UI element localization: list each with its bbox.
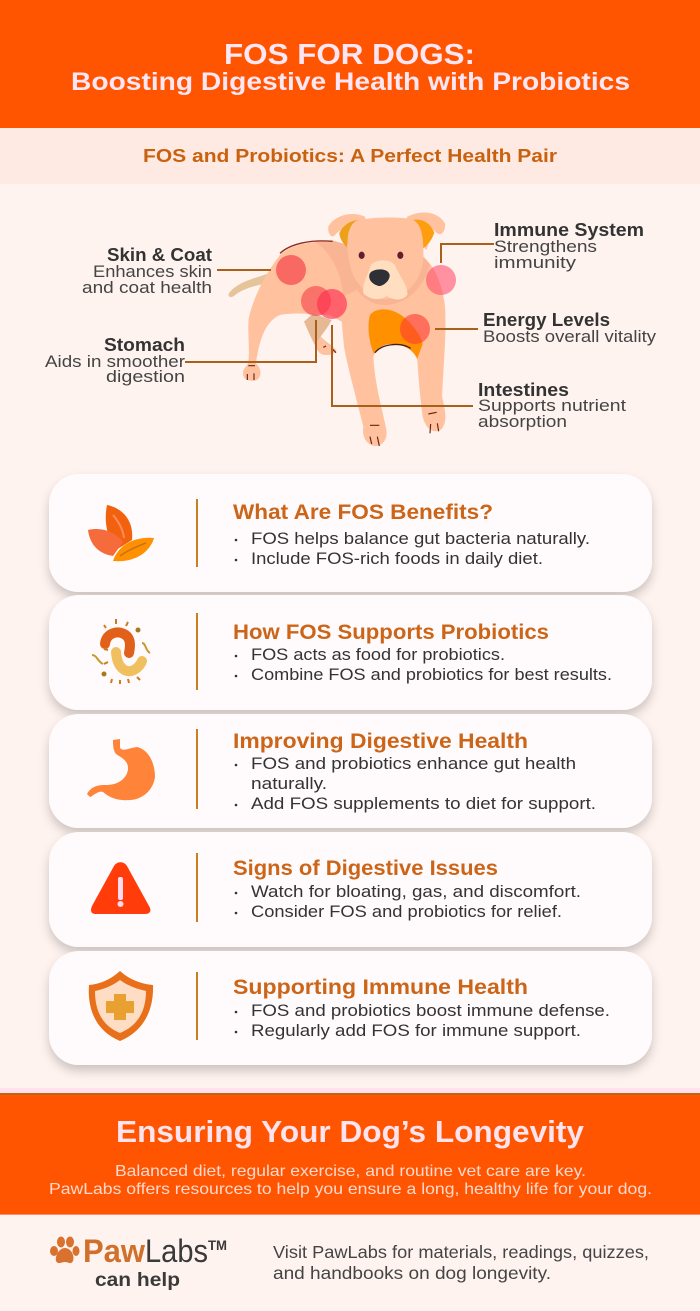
panel: signs of digestive issues: Consider FOS and probiotics for relief. [251,902,562,921]
callout: energy levels [483,310,657,346]
body shading [315,241,357,297]
icon: leaves [88,505,154,561]
icon: stomach [87,739,155,800]
callout: immune system [494,220,644,272]
logo: PawLabs: TM [208,1237,227,1253]
callout: intestines [478,380,626,431]
tail [228,274,267,297]
callout: stomach: Aids in smoother [45,352,185,371]
callout: immune system: immunity [494,253,577,272]
logo: PawLabs [50,1233,227,1291]
subtitle: Boosting Digestive Health with Probiotics [71,68,630,96]
logo: PawLabs: Paw [83,1233,145,1269]
chest patch [369,309,423,359]
callout: stomach: digestion [106,367,185,386]
closing text [273,1242,649,1283]
panel: how FOS supports probiotics: How FOS Supports Probiotics [233,621,549,644]
panel: improving digestive health: Improving Digestive Health [233,730,528,753]
panel: improving digestive health: naturally. [251,774,327,793]
footer banner [0,1088,700,1215]
panel: what are FOS benefits: FOS helps balance gut bacteria naturally. [251,529,590,548]
callout: skin and coat: Enhances skin [93,262,212,281]
callout: energy levels: Boosts overall vitality [483,327,657,346]
callout: intestines: absorption [478,412,567,431]
eyes and nose [359,252,365,259]
callout lines [185,244,494,406]
header banner [0,0,700,128]
icon: warning triangle [91,862,150,914]
body, near hind leg and front legs [243,242,445,446]
section heading band: FOS and Probiotics: A Perfect Health Pair [143,146,557,166]
logo: PawLabs: Labs [145,1233,208,1269]
muzzle [363,260,407,300]
section heading band [0,128,700,184]
panel: signs of digestive issues [49,832,652,947]
highlight circles [276,255,456,344]
panel: how FOS supports probiotics [49,595,652,710]
panel: supporting immune health: Supporting Immune Health [233,976,528,999]
footer text [49,1163,652,1198]
head [347,218,423,299]
ears [328,214,367,250]
panel: what are FOS benefits [49,474,652,592]
callout: skin and coat [82,245,212,297]
callout: intestines: Supports nutrient [478,396,626,415]
logo: PawLabs: can help [95,1270,180,1291]
callout: skin and coat: Skin & Coat [107,245,212,265]
closing text: Visit PawLabs for materials, readings, quizzes, [273,1242,649,1262]
panel: what are FOS benefits: Include FOS-rich foods in daily diet. [251,549,543,568]
dog anatomy illustration [228,212,445,446]
panel: signs of digestive issues: Signs of Digestive Issues [233,857,498,880]
paw marks [247,346,439,446]
panel: improving digestive health: FOS and probiotics enhance gut health [251,754,576,773]
callout: skin and coat: and coat health [82,278,212,297]
panel: signs of digestive issues: Watch for bloating, gas, and discomfort. [251,882,581,901]
icon: shield with cross [89,971,153,1041]
icon: paw [50,1236,80,1263]
panel: supporting immune health: Regularly add FOS for immune support. [251,1021,581,1040]
footer text: PawLabs offers resources to help you ensure a long, healthy life for your dog. [49,1181,652,1198]
callout: energy levels: Energy Levels [483,310,610,330]
panel: what are FOS benefits: What Are FOS Benefits? [233,501,493,524]
callout: stomach: Stomach [104,335,185,355]
callout: intestines: Intestines [478,380,569,400]
panel: improving digestive health [49,714,652,828]
footer heading: Ensuring Your Dog’s Longevity [116,1114,585,1149]
panel: improving digestive health: Add FOS supplements to diet for support. [251,794,596,813]
far hind leg [304,313,337,355]
closing text: and handbooks on dog longevity. [273,1263,551,1283]
footer text: Balanced diet, regular exercise, and routine vet care are key. [115,1163,586,1180]
icon: bacteria [92,619,150,684]
back outline [280,241,333,253]
panel: supporting immune health [49,951,652,1065]
callout: immune system: Immune System [494,220,644,240]
panel: supporting immune health: FOS and probiotics boost immune defense. [251,1001,610,1020]
title: FOS FOR DOGS: [224,39,475,71]
panel: how FOS supports probiotics: Combine FOS and probiotics for best results. [251,665,612,684]
head shading [348,250,430,305]
callout: immune system: Strengthens [494,237,597,256]
callout: stomach [45,335,185,386]
panel: how FOS supports probiotics: FOS acts as food for probiotics. [251,645,505,664]
